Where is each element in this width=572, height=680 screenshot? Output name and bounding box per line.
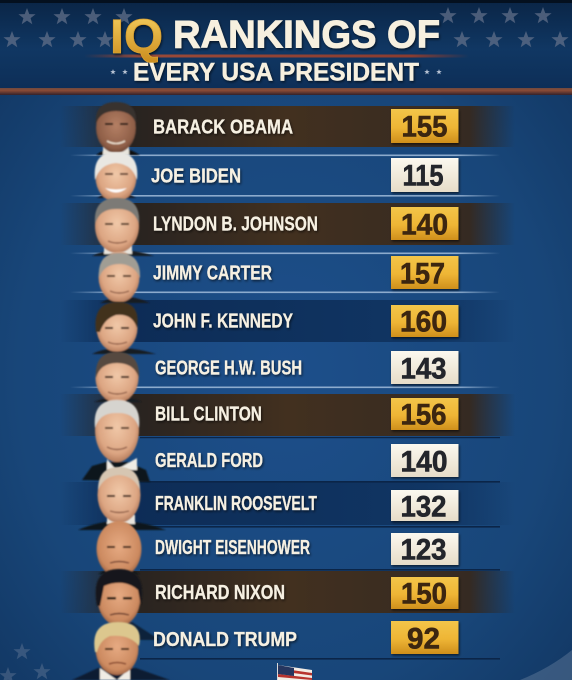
IQ score: Joe Biden 115: 115 xyxy=(402,160,444,192)
name: Barack Obama: BARACK OBAMA xyxy=(153,116,293,138)
portrait: Barack Obama xyxy=(96,102,140,155)
title xyxy=(110,11,440,86)
portrait: Bill Clinton xyxy=(82,398,150,482)
IQ score: Donald Trump 92: 92 xyxy=(407,622,440,656)
portrait: Joe Biden xyxy=(95,152,137,202)
star pattern xyxy=(3,7,569,47)
subtitle: EVERY USA PRESIDENT xyxy=(133,58,419,86)
row bands xyxy=(60,106,515,660)
IQ score: George H.W. Bush 143: 143 xyxy=(400,352,446,386)
IQ score: Joe Biden 115 xyxy=(391,158,458,192)
portrait: Jimmy Carter xyxy=(98,252,150,303)
IQ score: John F. Kennedy 160: 160 xyxy=(400,306,447,338)
name: Joe Biden: JOE BIDEN xyxy=(151,164,241,188)
subtitle stars xyxy=(110,69,442,74)
IQ score: Franklin Roosevelt 132: 132 xyxy=(400,490,446,524)
title underline xyxy=(84,54,469,58)
name: Lyndon B. Johnson: LYNDON B. JOHNSON xyxy=(153,212,318,236)
IQ score: Dwight Eisenhower 123: 123 xyxy=(400,534,446,566)
bottom-left faded stars xyxy=(0,643,51,680)
title words: rankings of: RANKINGS OF xyxy=(173,14,440,56)
IQ score: Richard Nixon 150: 150 xyxy=(401,578,447,610)
portrait: Donald Trump xyxy=(72,622,170,680)
portrait: Dwight Eisenhower xyxy=(96,521,142,577)
portrait: George H.W. Bush xyxy=(94,352,142,402)
header band xyxy=(0,0,572,95)
title word: IQ: IQ xyxy=(110,11,163,64)
icon: American flag xyxy=(277,663,312,680)
president names xyxy=(151,116,318,651)
name: George H.W. Bush: GEORGE H.W. BUSH xyxy=(155,356,302,380)
name: Gerald Ford: GERALD FORD xyxy=(155,449,263,472)
portrait: Richard Nixon xyxy=(96,569,160,640)
name: Franklin Roosevelt: FRANKLIN ROOSEVELT xyxy=(155,492,317,515)
portrait: John F. Kennedy xyxy=(92,302,156,354)
name: Donald Trump: DONALD TRUMP xyxy=(153,628,297,651)
header copper rule xyxy=(0,88,572,95)
IQ score: Jimmy Carter 157: 157 xyxy=(400,258,445,290)
portrait: Franklin Roosevelt xyxy=(78,467,166,530)
IQ score: Bill Clinton 156: 156 xyxy=(400,398,446,432)
name: Jimmy Carter: JIMMY CARTER xyxy=(153,262,272,284)
IQ score: Lyndon B. Johnson 140: 140 xyxy=(401,208,448,242)
name: Dwight Eisenhower: DWIGHT EISENHOWER xyxy=(155,536,310,559)
portrait: Lyndon B. Johnson xyxy=(92,198,154,256)
name: Richard Nixon: RICHARD NIXON xyxy=(155,581,285,604)
IQ score: Gerald Ford 140: 140 xyxy=(400,446,448,478)
IQ score: Donald Trump 92 xyxy=(391,621,458,656)
name: Bill Clinton: BILL CLINTON xyxy=(155,402,262,426)
IQ score: Barack Obama 155: 155 xyxy=(402,110,448,144)
bottom-right faded flag curve xyxy=(520,650,572,680)
name: John F. Kennedy: JOHN F. KENNEDY xyxy=(153,310,293,332)
